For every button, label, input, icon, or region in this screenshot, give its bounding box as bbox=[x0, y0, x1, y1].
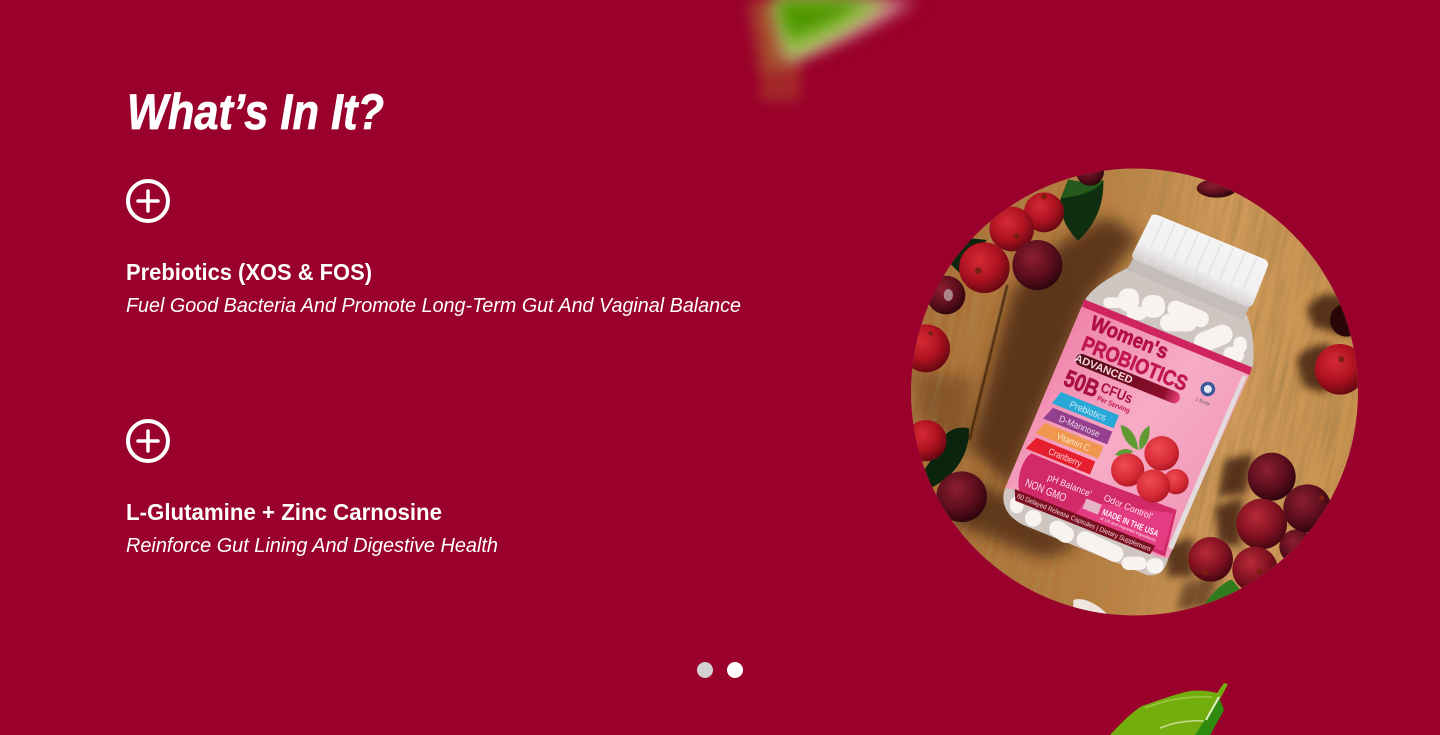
carousel pagination dots bbox=[697, 662, 743, 678]
label: made in the usa: MADE IN THE USA bbox=[1101, 507, 1161, 539]
label: probiotics: PROBIOTICS bbox=[1078, 332, 1191, 396]
label: vitamin c bar bbox=[1035, 421, 1103, 459]
label: d-mannose bar bbox=[1043, 406, 1112, 444]
label: advanced bar: ADVANCED bbox=[1073, 352, 1135, 387]
label: 50b: 50B bbox=[1060, 365, 1103, 403]
leaf bottom bbox=[1110, 683, 1228, 735]
bottle neck bbox=[1127, 255, 1250, 320]
label: advanced bar bbox=[1074, 354, 1180, 404]
ingredient 1: prebiotics bbox=[126, 181, 741, 317]
label: non gmo: NON GMO bbox=[1023, 477, 1068, 505]
heading: l-glutamine: L-Glutamine + Zinc Carnosine bbox=[126, 499, 442, 525]
icon: plus in circle bbox=[128, 421, 168, 461]
label: odor control: Odor Control' bbox=[1102, 493, 1154, 522]
label: ph balance: pH Balance' bbox=[1046, 472, 1093, 499]
label: vitamin c bar: Vitamin C bbox=[1055, 431, 1091, 453]
green leaves bbox=[924, 179, 1240, 604]
label: seal: 1 Body bbox=[1195, 396, 1211, 407]
heading: prebiotics: Prebiotics (XOS & FOS) bbox=[126, 259, 372, 285]
description: l-glutamine: Reinforce Gut Lining And Digestive Health bbox=[126, 535, 498, 557]
label: bottom strip: 60 Delayed Release Capsules | Dietary Supplement bbox=[1016, 493, 1151, 553]
label: cranberry bar bbox=[1026, 435, 1095, 474]
label: cfus: CFUs bbox=[1098, 380, 1135, 407]
product bottle bbox=[1003, 215, 1268, 575]
label: made in the usa: of US and imported ingredients bbox=[1099, 516, 1157, 543]
label: d-mannose bar: D-Mannose bbox=[1058, 414, 1102, 439]
label: cranberry bar: Cranberry bbox=[1047, 446, 1083, 469]
shadows bbox=[913, 217, 1350, 610]
description: prebiotics: Fuel Good Bacteria And Promote Long-Term Gut And Vaginal Balance bbox=[126, 295, 741, 317]
label: women's: Women's bbox=[1087, 312, 1172, 364]
label top stripe bbox=[1082, 299, 1252, 375]
label: prebiotics bar bbox=[1052, 390, 1119, 428]
label bottom panel bbox=[1018, 453, 1177, 557]
label: per serving: Per Serving bbox=[1096, 394, 1132, 415]
blurred leaf top bbox=[750, 0, 916, 102]
product photo in circle bbox=[911, 168, 1358, 616]
label: cranberry illustration bbox=[1111, 425, 1189, 503]
made in usa panel bbox=[1073, 502, 1173, 552]
title: What’s In It? bbox=[127, 84, 384, 140]
label: prebiotics bar: Prebiotics bbox=[1068, 399, 1108, 423]
label text in rotated frame bbox=[1014, 314, 1216, 554]
wooden table bbox=[911, 168, 1358, 616]
bottle cap bbox=[1132, 215, 1268, 307]
cranberries bbox=[902, 158, 1365, 615]
icon: plus in circle bbox=[128, 181, 168, 221]
capsules bbox=[1010, 288, 1247, 573]
label: made in the usa bbox=[1081, 499, 1161, 543]
label right text panel bbox=[1168, 375, 1247, 550]
label: seal bbox=[1196, 382, 1216, 406]
label background bbox=[1005, 300, 1252, 558]
ingredient 2: l-glutamine bbox=[126, 421, 498, 557]
bottle body bbox=[1003, 267, 1254, 575]
